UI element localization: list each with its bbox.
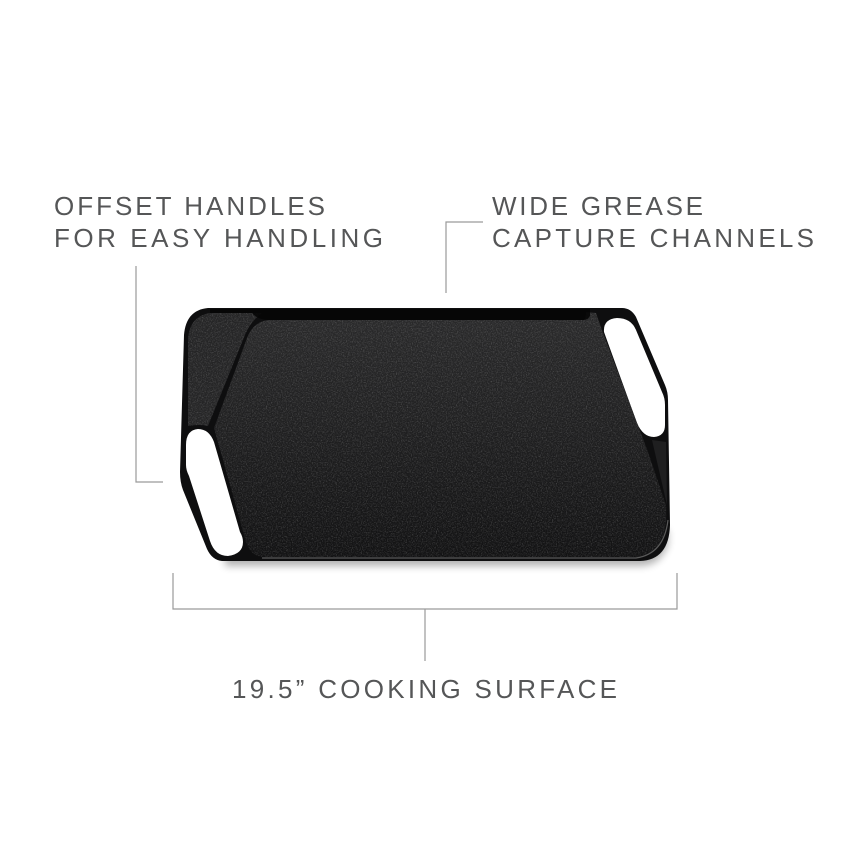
label: cooking surface: 19.5” COOKING SURFACE <box>232 674 617 704</box>
grease channel left <box>188 313 262 426</box>
handle openings kept white over the shadow <box>186 429 243 556</box>
label: offset handles <box>54 191 383 253</box>
label: grease channels: WIDE GREASE <box>492 191 703 221</box>
leader line: handles <box>136 266 163 482</box>
griddle product illustration <box>180 308 670 566</box>
dimension bracket <box>173 573 677 661</box>
top channel groove <box>210 309 590 320</box>
cooking surface <box>214 312 666 557</box>
grease channel right <box>652 440 667 505</box>
leader line: channels <box>446 222 483 293</box>
griddle body with handle cut-outs <box>180 308 670 561</box>
bottom rim highlight <box>262 520 668 558</box>
label: offset handles: OFFSET HANDLES <box>54 191 325 221</box>
label: grease channels: CAPTURE CHANNELS <box>492 223 814 253</box>
label: grease channels <box>492 191 814 253</box>
label: offset handles: FOR EASY HANDLING <box>54 223 383 253</box>
griddle shadow <box>225 530 668 566</box>
